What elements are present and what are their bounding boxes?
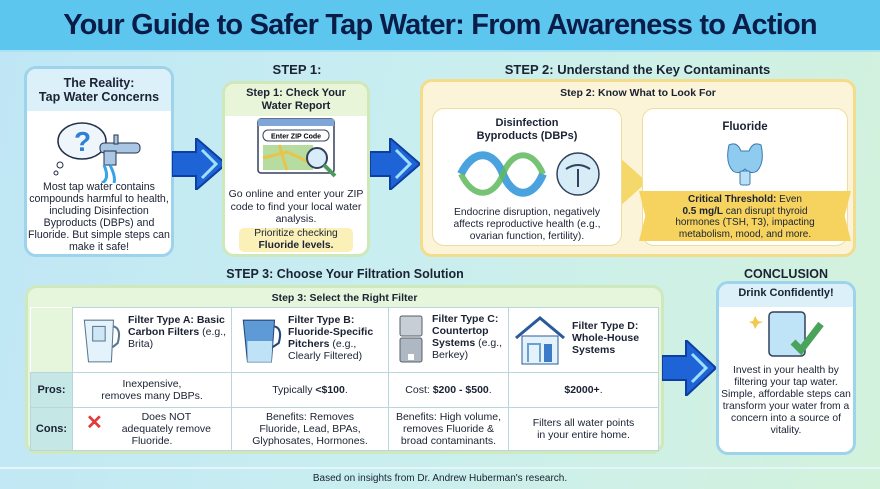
heading: DBPs: Disinfection xyxy=(496,117,558,129)
table: filters: Typically <$100. xyxy=(272,384,348,396)
table: filters: Filter Type A: Basic Carbon Filters (e.g., Brita) xyxy=(128,314,226,350)
panel: step 2 xyxy=(420,79,856,257)
heading: check water report: Water Report xyxy=(262,100,330,112)
arrow 1 xyxy=(172,138,222,190)
panel: the reality xyxy=(24,66,174,257)
table: filters: $2000+. xyxy=(564,384,603,396)
heading: step 2: STEP 2: Understand the Key Contaminants xyxy=(505,62,770,77)
heading: the reality: The Reality: xyxy=(64,76,134,90)
heading: DBPs: Byproducts (DBPs) xyxy=(477,130,577,142)
callout: critical threshold: metabolism, mood, and more. xyxy=(679,228,811,240)
table: filters: removes many DBPs. xyxy=(101,390,203,402)
icon: cycle arrows and reproductive xyxy=(458,151,600,197)
table: filters: Cons: xyxy=(36,423,67,435)
table: filters: Benefits: High volume, xyxy=(396,411,501,423)
text: step 1 body: Go online and enter your ZIP code to find your local water analysis. xyxy=(229,188,363,225)
arrow 2 xyxy=(370,138,420,190)
table: filters xyxy=(30,307,659,451)
panel: DBPs xyxy=(432,108,622,246)
table: filters: Does NOT xyxy=(142,411,191,423)
table: filters: Benefits: Removes xyxy=(266,411,354,423)
table: filters: Fluoride, Lead, BPAs, xyxy=(259,423,361,435)
heading: conclusion: CONCLUSION xyxy=(744,267,828,281)
table: filters: Filter Type D: Whole-House Systems xyxy=(572,320,639,356)
text: DBP effects: Endocrine disruption, negatively affects reproductive health (e.g., ovarian function, fertility). xyxy=(454,207,600,242)
heading: fluoride: Fluoride xyxy=(722,121,768,133)
table: filters: ✕ xyxy=(86,412,103,434)
callout: fluoride levels: Prioritize checking Fluoride levels. xyxy=(254,228,338,251)
heading: drink confidently: Drink Confidently! xyxy=(738,287,834,299)
footer xyxy=(0,467,880,489)
title bar: Your Guide to Safer Tap Water: From Awareness to Action xyxy=(63,9,817,41)
table: filters: adequately remove xyxy=(122,423,211,435)
table: filters: Fluoride. xyxy=(132,435,172,447)
table: filters: Filter Type C: Countertop Systems (e.g., Berkey) xyxy=(432,313,502,361)
footer: Based on insights from Dr. Andrew Huberman's research. xyxy=(313,473,567,484)
heading: the reality: Tap Water Concerns xyxy=(39,90,159,104)
subheading: select the right filter: Step 3: Select the Right Filter xyxy=(272,292,417,304)
table: filters: Filters all water points xyxy=(533,417,634,429)
heading: drink confidently xyxy=(719,284,853,307)
heading: DBPs xyxy=(477,117,577,142)
heading: step 1: STEP 1: xyxy=(273,62,321,77)
panel: step 3 xyxy=(25,285,664,454)
heading: the reality xyxy=(27,69,171,111)
heading: check water report: Step 1: Check Your xyxy=(246,87,346,99)
chevron xyxy=(622,160,642,204)
panel: conclusion xyxy=(716,281,856,455)
callout: critical threshold: Critical Threshold: Even xyxy=(688,194,802,205)
callout: critical threshold xyxy=(639,191,851,241)
heading: step 3: STEP 3: Choose Your Filtration Solution xyxy=(226,267,464,281)
icon: faucet with question cloud: ? xyxy=(74,126,91,157)
table: filters: Pros: xyxy=(37,384,66,396)
table: filters: Filter Type B: Fluoride-Specific Pitchers (e.g., Clearly Filtered) xyxy=(288,314,373,362)
arrow 3 xyxy=(662,340,716,396)
icon: thyroid xyxy=(727,143,763,186)
icon: glass with check xyxy=(749,311,824,357)
table: filters: removes Fluoride & xyxy=(403,423,494,435)
icon: faucet with question cloud xyxy=(54,122,140,183)
title bar xyxy=(0,0,880,52)
icon: zip code browser xyxy=(257,118,336,178)
callout: critical threshold: 0.5 mg/L can disrupt thyroid xyxy=(682,206,808,216)
text: reality body: Most tap water contains compounds harmful to health, including Disinfection Byproducts (DBPs) and Fluoride. But simple steps can make it safe! xyxy=(28,181,170,253)
heading: check water report xyxy=(225,84,367,116)
table: filters: Glyphosates, Hormones. xyxy=(252,435,368,447)
text: conclusion body: Invest in your health by filtering your tap water. Simple, affordable steps can transform your water from a concern into a source of vitality. xyxy=(721,365,851,436)
icon: zip code browser: Enter ZIP Code xyxy=(271,134,321,140)
subheading: know what to look for: Step 2: Know What to Look For xyxy=(560,87,716,99)
table: filters: Inexpensive, xyxy=(123,378,181,390)
panel: fluoride xyxy=(642,108,848,246)
callout: critical threshold: hormones (TSH, T3), impacting xyxy=(675,217,815,228)
table: filters: in your entire home. xyxy=(537,429,630,441)
panel: step 1 xyxy=(222,81,370,257)
table: filters: Cost: $200 - $500. xyxy=(405,384,492,396)
table: filters: broad contaminants. xyxy=(401,435,496,447)
